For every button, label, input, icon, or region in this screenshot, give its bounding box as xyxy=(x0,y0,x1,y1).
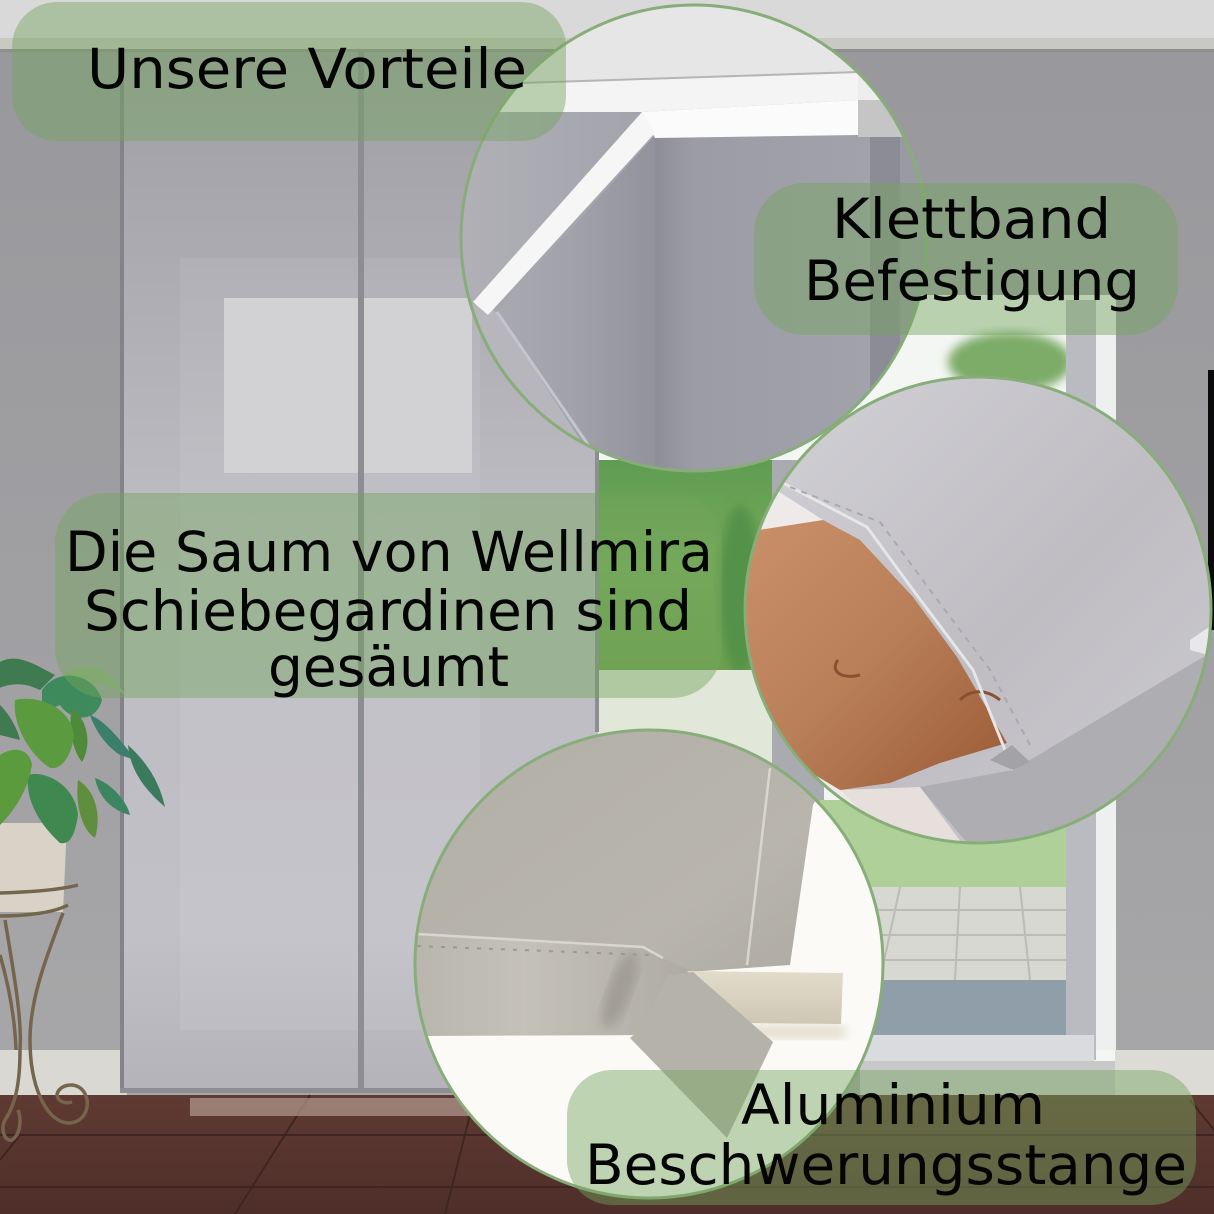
label: Klettband Befestigung: Klettband xyxy=(832,187,1111,251)
label: hem description: gesäumt xyxy=(268,635,509,699)
label: Aluminium Beschwerungsstange xyxy=(567,1070,1196,1205)
photo circle: velcro fastening xyxy=(460,0,930,480)
stand xyxy=(0,885,87,1140)
floor xyxy=(0,1095,1214,1214)
label: hem description: Die Saum von Wellmira xyxy=(65,520,713,584)
label: Klettband Befestigung: Befestigung xyxy=(804,249,1140,313)
velcro strip xyxy=(473,112,655,315)
window with garden view xyxy=(590,295,1116,1096)
right curtain section xyxy=(655,137,754,470)
photo circle: aluminium weight bar xyxy=(410,725,890,1205)
label: Unsere Vorteile: Unsere Vorteile xyxy=(87,37,527,101)
label: Unsere Vorteile xyxy=(12,2,566,141)
hand xyxy=(740,520,1007,790)
white backdrop xyxy=(761,492,858,808)
label: Klettband Befestigung xyxy=(754,183,1178,335)
hem and stitch xyxy=(783,483,1013,770)
lower fabric layer xyxy=(920,656,1205,842)
weight bar xyxy=(687,971,843,1024)
label: Aluminium Beschwerungsstange: Aluminium xyxy=(741,1073,1045,1137)
fabric upper xyxy=(418,732,815,972)
label: Aluminium Beschwerungsstange: Beschwerungsstange xyxy=(585,1133,1187,1197)
bar shadow xyxy=(750,1025,845,1039)
pot xyxy=(0,823,67,912)
label: hem description: Schiebegardinen sind xyxy=(84,579,692,643)
fabric flap xyxy=(630,972,773,1138)
sliding curtain panels xyxy=(120,52,599,1093)
fabric lower hem xyxy=(428,938,688,1036)
label: hem description xyxy=(55,493,722,699)
photo circle: hem with hand xyxy=(740,375,1214,860)
ceiling xyxy=(523,6,856,84)
folded curtain section xyxy=(592,136,655,466)
plant on stand xyxy=(0,659,165,1140)
rail xyxy=(490,73,858,112)
